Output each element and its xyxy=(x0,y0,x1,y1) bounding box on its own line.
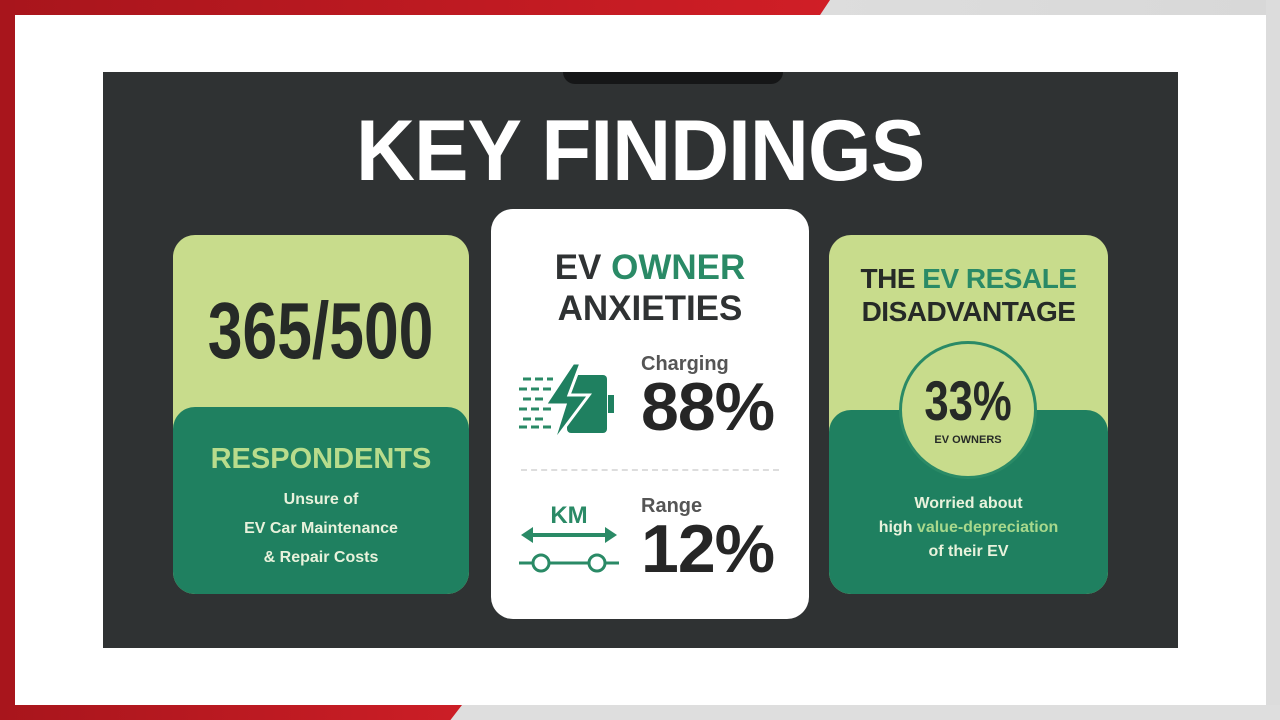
stat: charging: Charging xyxy=(641,353,729,375)
stat: range: Range xyxy=(641,495,702,517)
description: Unsure of xyxy=(284,491,358,508)
heading: DISADVANTAGE xyxy=(862,296,1075,327)
heading: ANXIETIES xyxy=(558,289,742,328)
heading: THE EV RESALE xyxy=(860,263,1076,294)
icon: km range xyxy=(519,502,619,572)
dark infographic panel xyxy=(103,72,1178,648)
description xyxy=(244,491,398,566)
icon: km range: KM xyxy=(550,502,588,529)
circle stat: 33%: EV OWNERS xyxy=(934,434,1002,446)
heading xyxy=(860,263,1076,327)
green lower block xyxy=(173,407,469,594)
description: & Repair Costs xyxy=(264,549,378,566)
frame: top red bar xyxy=(0,0,1280,15)
description: Worried about xyxy=(914,495,1023,512)
icon: battery charging xyxy=(519,364,614,435)
divider xyxy=(521,469,779,471)
green lower block xyxy=(829,410,1108,594)
stat: range: 12% xyxy=(641,511,774,587)
description xyxy=(879,495,1058,560)
title: KEY FINDINGS xyxy=(356,103,925,199)
heading: EV OWNER xyxy=(555,248,745,287)
description: high value-depreciation xyxy=(879,519,1058,536)
circle stat: 33% xyxy=(899,341,1037,479)
description: EV Car Maintenance xyxy=(244,520,398,537)
panel: EV resale disadvantage xyxy=(829,235,1108,594)
heading xyxy=(555,248,745,328)
frame: left red stripe xyxy=(0,0,15,720)
description: of their EV xyxy=(928,543,1008,560)
circle stat: 33%: 33% xyxy=(924,369,1012,432)
stat: charging: 88% xyxy=(641,369,774,445)
frame: bottom bar xyxy=(0,705,1280,720)
stat: 365/500: 365/500 xyxy=(208,286,434,375)
decorative car shadow at top xyxy=(563,72,783,84)
label: respondents: RESPONDENTS xyxy=(211,443,431,475)
panel: respondents xyxy=(173,235,469,594)
panel: EV owner anxieties xyxy=(491,209,809,619)
frame: right grey stripe xyxy=(1266,0,1280,720)
